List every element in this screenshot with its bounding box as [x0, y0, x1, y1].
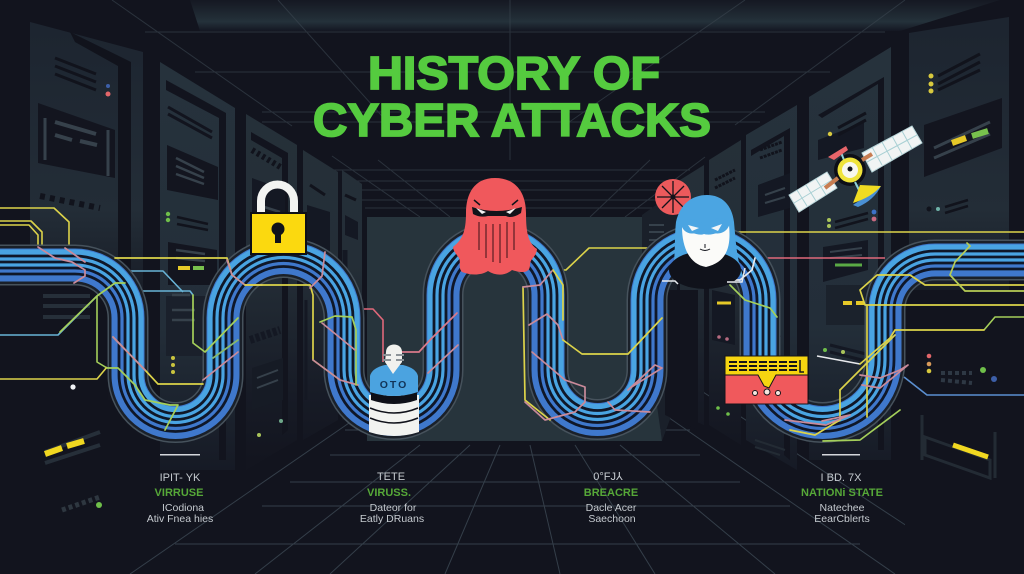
server racks right: [642, 0, 1024, 574]
label: early drivers: Eatly DRuans: [360, 513, 424, 525]
label: nation state: I BD. 7X: [821, 472, 862, 484]
rack b: [809, 47, 891, 460]
icon: person on database stack: [369, 344, 419, 436]
rack B: [160, 62, 235, 470]
center back wall: [367, 217, 662, 441]
label: breaches: Dacle Acer: [586, 502, 637, 514]
title: CYBER ATTACKS: [313, 94, 711, 146]
label: viruses era: [147, 454, 213, 525]
icon: red and yellow server box: [725, 356, 808, 404]
title: HISTORY OF: [368, 47, 660, 99]
label: early drivers: TETE: [377, 471, 405, 483]
label: viruses era: Ativ Fnea hies: [147, 513, 213, 525]
label: nation state: Natechee: [820, 502, 865, 514]
rack C: [246, 114, 297, 470]
rack d, e and f: [642, 140, 741, 445]
wires over the pipeline: [38, 243, 1024, 441]
label: breaches: [584, 471, 638, 525]
server racks left: [0, 22, 362, 574]
rack a: [905, 0, 1024, 574]
rack D and E: [303, 150, 362, 440]
label: nation state: NATIONi STATE: [801, 487, 883, 499]
pipeline: winding blue cable timeline: [0, 233, 1024, 432]
icon: padlock: [251, 185, 306, 254]
rack c: [746, 105, 797, 470]
label: breaches: Saechoon: [588, 513, 636, 525]
icon: red hooded ghost: [453, 178, 537, 275]
label: viruses era: ICodiona: [162, 502, 204, 514]
label: viruses era: IPIT- YK: [160, 472, 201, 484]
icon: person on database stack: OTO: [380, 379, 408, 391]
icon: red spark badge: [655, 179, 691, 215]
icon: satellite: [789, 126, 922, 212]
rack A: [0, 22, 143, 574]
label: viruses era: VIRRUSE: [155, 487, 203, 499]
label: early drivers: VIRUSS.: [367, 487, 411, 499]
label: early drivers: Dateor for: [370, 502, 417, 514]
floor grid: [130, 390, 980, 574]
label: early drivers: [360, 471, 424, 525]
wires behind the pipeline: [0, 208, 1024, 395]
icon: masked hooded hacker: [662, 195, 745, 289]
label: breaches: 0°FJ⅄: [593, 471, 623, 483]
label: nation state: EearCblerts: [814, 513, 870, 525]
title: [313, 47, 711, 146]
label: nation state: [801, 454, 883, 525]
label: breaches: BREACRE: [584, 487, 638, 499]
